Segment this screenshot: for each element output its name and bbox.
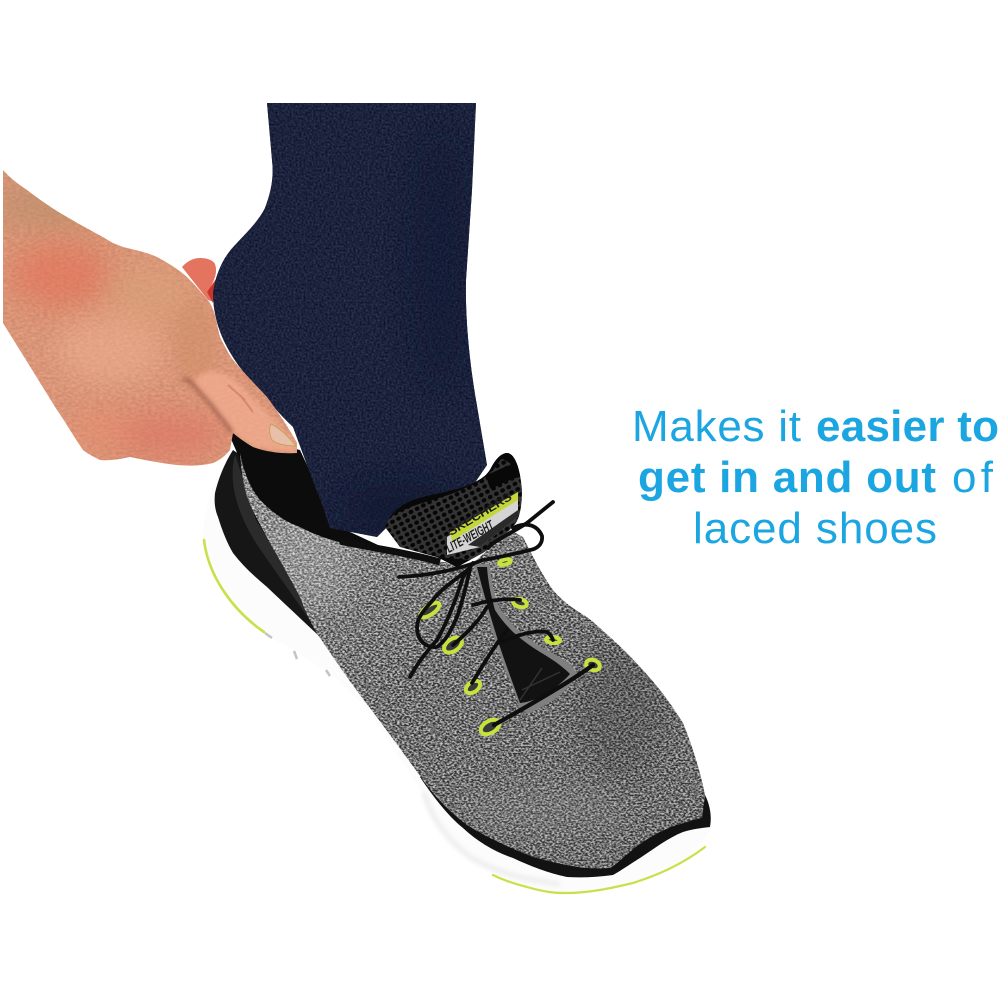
hand: fingers behind the heel (182, 258, 216, 303)
hand: back of hand and thumb (0, 160, 310, 470)
shoe (203, 100, 720, 893)
caption text: laced shoes (693, 504, 937, 553)
tongue logo label: LITE-WEIGHT (443, 517, 496, 556)
hand: crease between thumb and palm (183, 378, 232, 432)
shoe: lime sole stripes (204, 540, 705, 893)
caption text: Makes it (632, 402, 801, 451)
shoe: black interior collar (228, 432, 410, 560)
tongue logo label: SKECHERS (446, 491, 514, 539)
shoe: lacing opening (474, 563, 578, 714)
shoe: black collar trim (340, 541, 440, 562)
caption text: easier to (816, 402, 999, 451)
shoe: black elastic laces (399, 502, 593, 725)
thumb nail (270, 424, 296, 446)
shoe: white sole (203, 450, 712, 893)
caption text: get in and out (638, 453, 936, 502)
navy sock (205, 100, 495, 545)
shoe: mesh tongue (385, 453, 522, 566)
shoe: black heel band and toe rim (215, 450, 711, 877)
caption text: of (952, 453, 994, 502)
shoe: grey knit upper (240, 453, 705, 868)
shoe: lime eyelets (418, 558, 601, 737)
photo: hand pulling a laced shoe on over a sock (0, 100, 720, 893)
caption text (632, 402, 999, 553)
